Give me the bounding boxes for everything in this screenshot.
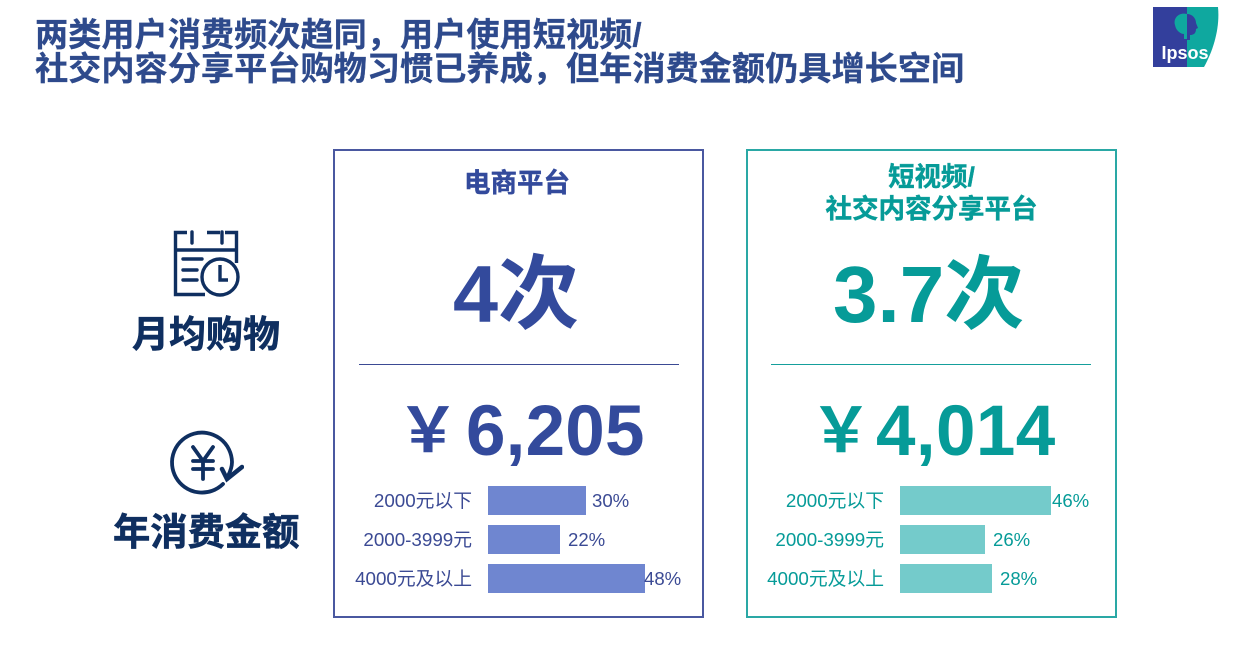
spend: 4,014: ￥ <box>810 397 872 466</box>
bar chart: e-commerce spend: 2000元以下 <box>374 490 472 511</box>
bar chart: short video spend: 46% <box>1052 490 1089 511</box>
label: monthly shopping: 月均购物 <box>132 314 280 355</box>
title: 社交内容分享平台购物习惯已养成，但年消费金额仍具增长空间 <box>35 51 964 88</box>
bar chart: short video spend: 26% <box>993 529 1030 550</box>
bar chart: e-commerce spend: 22% <box>568 529 605 550</box>
panel: e-commerce <box>333 149 704 618</box>
icon: Ipsos logo <box>1153 7 1218 67</box>
frequency: 4 times: 4次 <box>453 250 579 340</box>
icon: Ipsos logo: Ipsos <box>1161 43 1209 63</box>
bar chart: e-commerce spend: 4000元及以上 <box>355 568 472 589</box>
frequency: 3.7 times: 3.7次 <box>833 250 1024 339</box>
bar chart: e-commerce spend: 48% <box>644 568 681 589</box>
bar chart: short video spend: 2000-3999元 <box>775 529 884 550</box>
bar chart: short video spend <box>767 486 1089 593</box>
title <box>35 17 964 88</box>
bar chart: e-commerce spend: 30% <box>592 490 629 511</box>
bar chart: short video spend: 2000元以下 <box>786 490 884 511</box>
bar chart: short video spend: 4000元及以上 <box>767 568 884 589</box>
heading: short video and social <box>826 162 1038 224</box>
spend: 6,205: 6,205 <box>466 392 645 471</box>
label: annual spend: 年消费金额 <box>113 511 299 553</box>
bar chart: e-commerce spend: 2000-3999元 <box>363 529 472 550</box>
panel: short video and social <box>746 149 1117 618</box>
spend: 6,205: ￥ <box>397 397 459 466</box>
title: 两类用户消费频次趋同，用户使用短视频/ <box>35 17 642 54</box>
bar chart: e-commerce spend <box>355 486 681 593</box>
heading: short video and social: 社交内容分享平台 <box>826 194 1038 224</box>
spend: 4,014: 4,014 <box>876 392 1056 471</box>
icon: yuan cycle <box>170 430 244 494</box>
icon: calendar with clock <box>174 230 240 297</box>
heading: e-commerce: 电商平台 <box>464 168 570 198</box>
bar chart: short video spend: 28% <box>1000 568 1037 589</box>
heading: short video and social: 短视频/ <box>888 162 975 192</box>
